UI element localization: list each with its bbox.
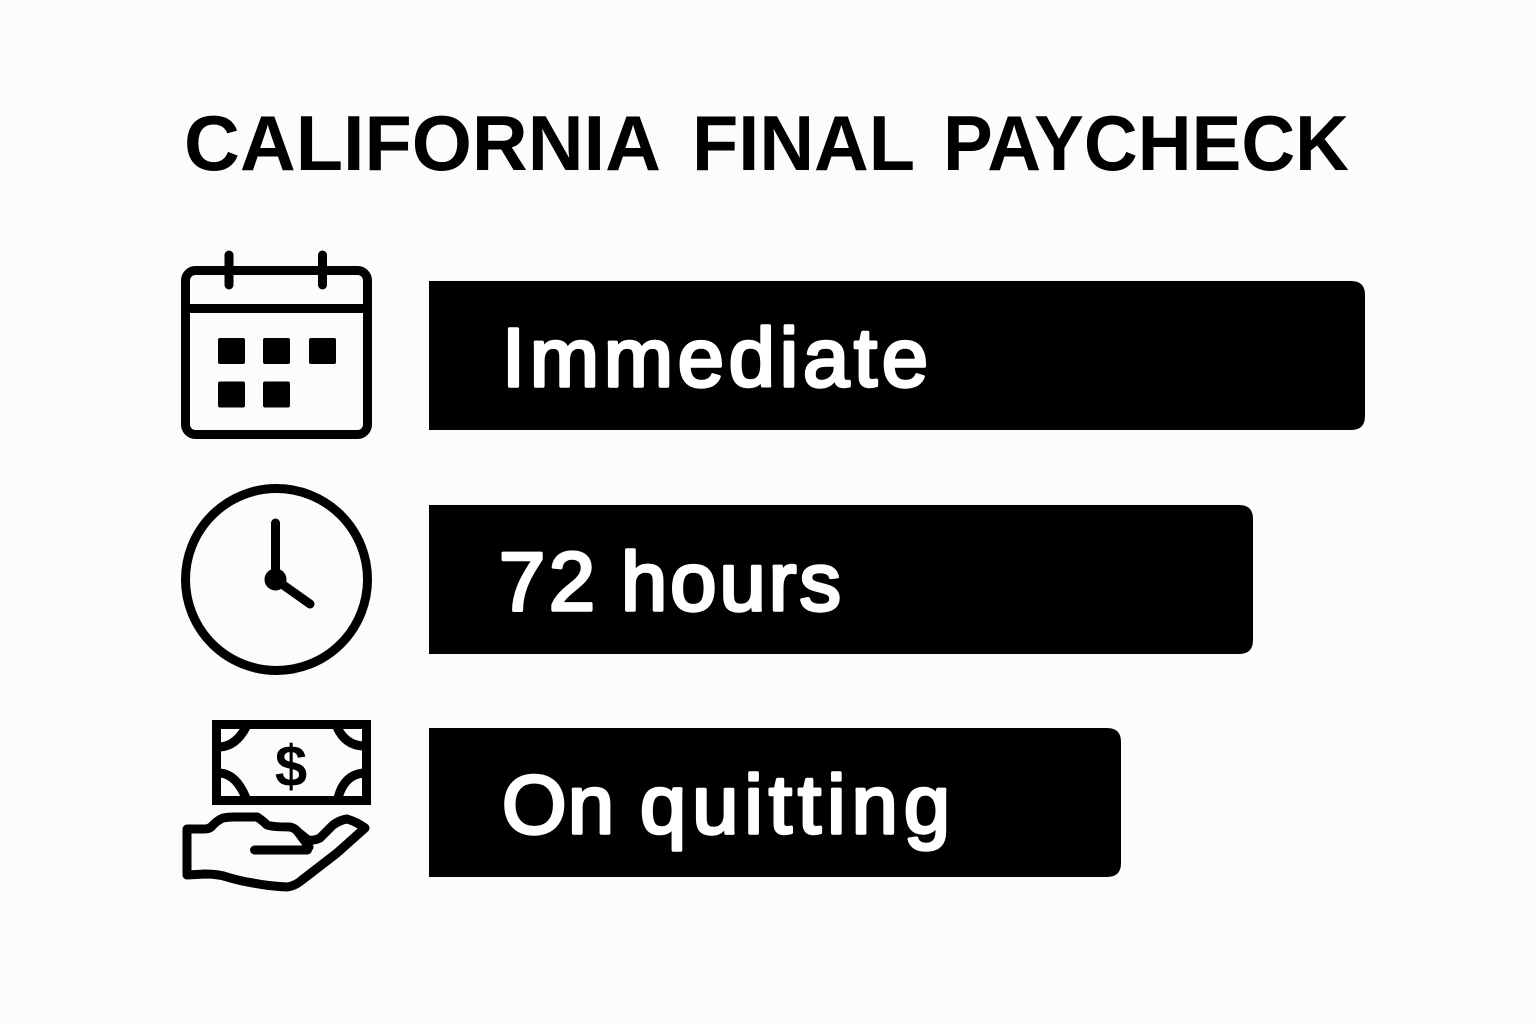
hand (187, 817, 365, 887)
bar: 72 hours: 72 (499, 535, 595, 628)
title: PAYCHECK (943, 99, 1349, 187)
bar: on quitting: On (502, 758, 614, 851)
icon: clock (186, 488, 368, 670)
bar: immediate: Immediate (502, 311, 928, 404)
bar: on quitting: quitting (640, 758, 950, 851)
icon: calendar (186, 255, 368, 434)
banknote (216, 724, 366, 800)
bar: on quitting (429, 728, 1121, 877)
title: FINAL (692, 99, 915, 187)
bar: 72 hours: hours (621, 535, 841, 628)
bar: 72 hours (429, 505, 1253, 654)
title (184, 99, 1349, 187)
bar: immediate (429, 281, 1365, 430)
icon: money in hand (187, 724, 366, 887)
title: CALIFORNIA (184, 99, 661, 187)
banknote: $ (275, 734, 307, 799)
